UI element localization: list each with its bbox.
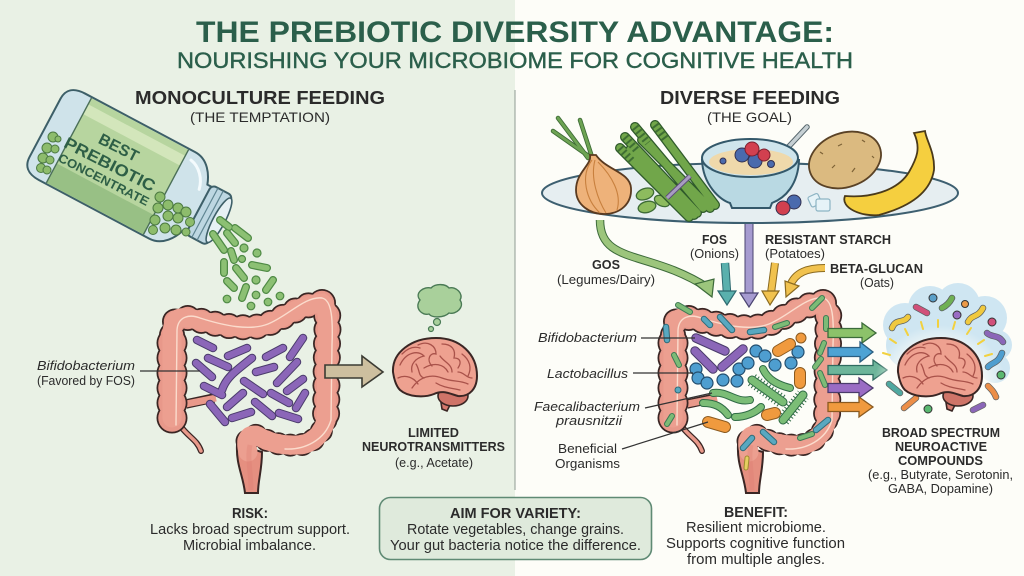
labels: gut organisms: Beneficial bbox=[558, 442, 617, 456]
arrow: resistant starch bbox=[762, 263, 779, 305]
benefit text bbox=[666, 504, 845, 568]
labels: gut organisms: Organisms bbox=[555, 457, 620, 471]
label: limited neurotransmitters: (e.g., Acetate) bbox=[395, 455, 473, 470]
heading: monoculture feeding: MONOCULTURE FEEDING bbox=[135, 88, 385, 108]
colon: monoculture bbox=[172, 298, 332, 493]
microbes on the colon wall bbox=[666, 298, 828, 468]
fiber labels: (Onions) bbox=[690, 246, 739, 261]
benefit text: Resilient microbiome. bbox=[686, 520, 826, 536]
arrow: GOS bbox=[600, 220, 714, 297]
neuroactive cloud bbox=[874, 283, 1012, 445]
purple bifidobacterium: monoculture bbox=[196, 338, 305, 422]
labels: gut organisms: Lactobacillus bbox=[547, 367, 628, 381]
label: broad spectrum neuroactive compounds: NEUROACTIVE bbox=[895, 439, 987, 454]
heading: diverse feeding: DIVERSE FEEDING bbox=[660, 88, 840, 108]
callout: aim for variety: Your gut bacteria notice the difference. bbox=[390, 538, 641, 554]
plate of foods bbox=[542, 118, 958, 223]
heading: diverse feeding bbox=[660, 88, 840, 125]
callout: aim for variety bbox=[380, 498, 652, 560]
risk text: RISK: bbox=[232, 505, 268, 522]
label: limited neurotransmitters: NEUROTRANSMITTERS bbox=[362, 439, 505, 454]
sugar cubes bbox=[807, 193, 830, 211]
bottle pill clusters bbox=[36, 132, 194, 236]
labels: gut organisms bbox=[534, 331, 712, 471]
compounds around brain bbox=[883, 294, 1005, 413]
background: right panel bbox=[515, 0, 1024, 576]
label: bifidobacterium favored by FOS: Bifidobacterium bbox=[37, 359, 135, 373]
fiber labels: BETA-GLUCAN bbox=[830, 261, 923, 276]
benefit text: from multiple angles. bbox=[687, 552, 825, 568]
label: broad spectrum neuroactive compounds: (e.g., Butyrate, Serotonin, bbox=[868, 467, 1013, 482]
title: THE PREBIOTIC DIVERSITY ADVANTAGE: bbox=[196, 16, 834, 49]
green faecalibacterium bbox=[703, 369, 803, 420]
orange organisms bbox=[708, 333, 806, 427]
label: broad spectrum neuroactive compounds: GABA, Dopamine) bbox=[888, 481, 993, 496]
fiber labels: RESISTANT STARCH bbox=[765, 232, 891, 247]
oat bowl bbox=[702, 127, 807, 208]
title: NOURISHING YOUR MICROBIOME FOR COGNITIVE HEALTH bbox=[177, 48, 853, 73]
small berries bbox=[776, 195, 801, 215]
falling prebiotic pills bbox=[213, 220, 284, 310]
onion bbox=[553, 118, 631, 214]
callout: aim for variety: Rotate vegetables, change grains. bbox=[407, 522, 624, 538]
arrow: FOS bbox=[718, 263, 736, 305]
icon: brain diverse bbox=[898, 338, 982, 411]
fiber labels bbox=[557, 232, 923, 290]
arrow: beta-glucan bbox=[785, 268, 825, 297]
risk text: Microbial imbalance. bbox=[183, 538, 316, 554]
fiber labels: (Oats) bbox=[860, 275, 894, 290]
compound arrows to brain bbox=[828, 323, 887, 417]
asparagus bbox=[620, 125, 715, 217]
bottle label text bbox=[56, 131, 158, 209]
fiber labels: (Potatoes) bbox=[765, 246, 825, 261]
potato bbox=[801, 122, 889, 198]
benefit text: BENEFIT: bbox=[724, 504, 788, 521]
title bbox=[177, 16, 853, 73]
colon: diverse bbox=[673, 298, 833, 493]
fiber arrows into gut bbox=[600, 220, 825, 307]
microbes inside the diverse gut bbox=[690, 333, 806, 427]
arrow: gut to brain limited bbox=[325, 356, 383, 387]
labels: gut organisms: Faecalibacterium bbox=[534, 400, 640, 414]
label: limited neurotransmitters: LIMITED bbox=[408, 425, 459, 440]
label: limited neurotransmitters bbox=[362, 425, 505, 470]
icon: thought cloud bbox=[418, 285, 461, 332]
label: bifidobacterium favored by FOS: (Favored by FOS) bbox=[37, 374, 135, 388]
background: left panel bbox=[0, 0, 515, 576]
bottle label text: PREBIOTIC bbox=[61, 134, 158, 196]
label: broad spectrum neuroactive compounds: BROAD SPECTRUM bbox=[882, 425, 1000, 440]
risk text bbox=[150, 505, 350, 554]
callout: aim for variety: AIM FOR VARIETY: bbox=[450, 505, 581, 522]
label: bifidobacterium favored by FOS bbox=[37, 359, 200, 388]
fiber labels: (Legumes/Dairy) bbox=[557, 272, 655, 287]
label: broad spectrum neuroactive compounds: COMPOUNDS bbox=[898, 453, 983, 468]
labels: gut organisms: prausnitzii bbox=[555, 414, 623, 428]
heading: diverse feeding: (THE GOAL) bbox=[707, 109, 792, 125]
plate bbox=[542, 163, 958, 223]
blue lactobacilli bbox=[690, 345, 804, 389]
risk text: Lacks broad spectrum support. bbox=[150, 522, 350, 538]
bottle label text: CONCENTRATE bbox=[56, 151, 151, 209]
heading: monoculture feeding: (THE TEMPTATION) bbox=[190, 109, 330, 125]
icon: brain limited bbox=[393, 338, 477, 411]
legumes bbox=[635, 186, 671, 215]
heading: monoculture feeding bbox=[135, 88, 385, 125]
banana bbox=[844, 131, 934, 215]
icon: prebiotic bottle bbox=[22, 85, 247, 266]
label: broad spectrum neuroactive compounds bbox=[868, 425, 1013, 496]
purple bifidobacteria bbox=[695, 338, 743, 369]
bottle label text: BEST bbox=[95, 131, 141, 166]
benefit text: Supports cognitive function bbox=[666, 536, 845, 552]
labels: gut organisms: Bifidobacterium bbox=[538, 331, 637, 345]
arrow: purple central bbox=[740, 224, 758, 307]
fiber labels: GOS bbox=[592, 257, 620, 272]
fiber labels: FOS bbox=[702, 232, 727, 247]
